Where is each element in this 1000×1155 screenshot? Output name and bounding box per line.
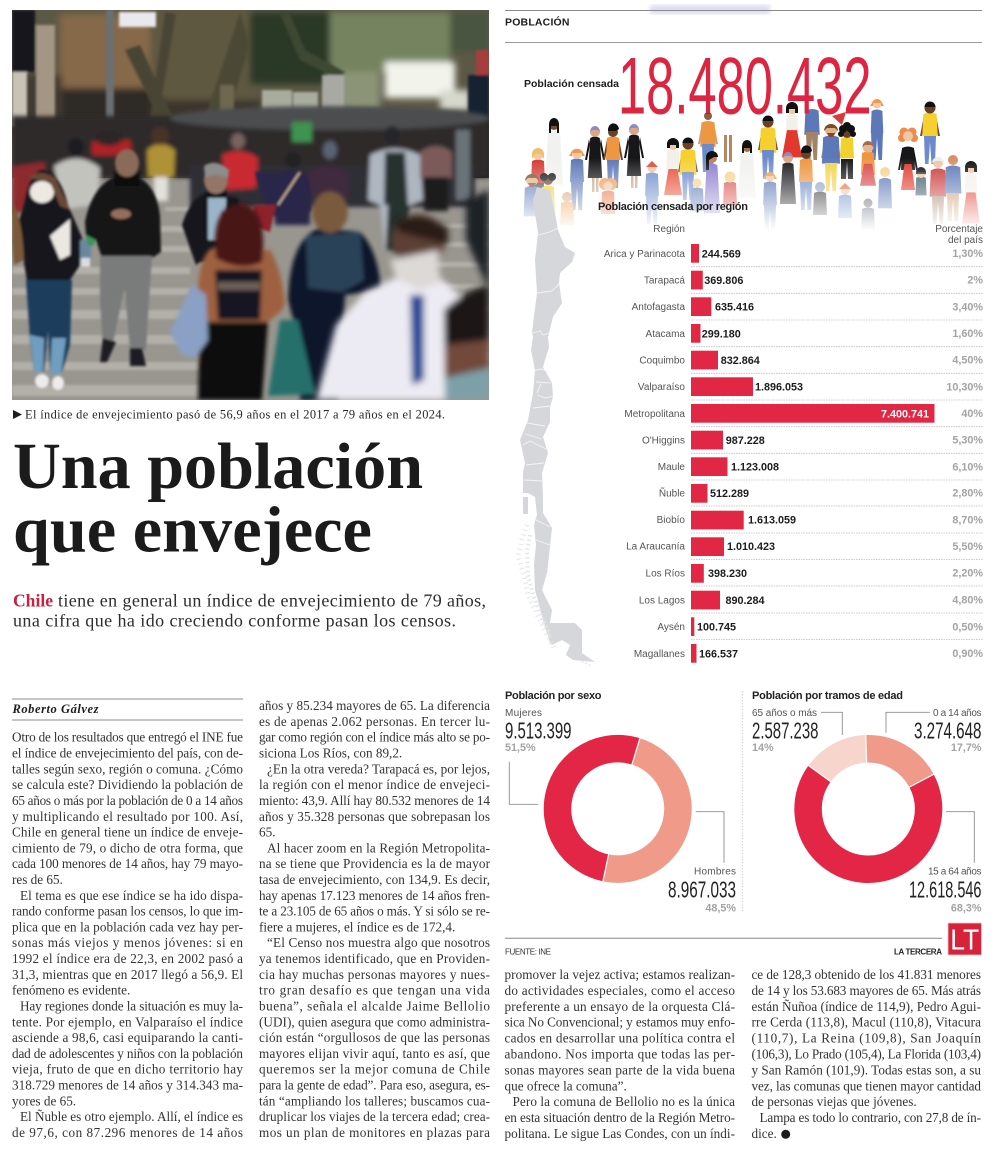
- article column 3: preferente a un ensayo de la orquesta Clá-: [504, 999, 735, 1014]
- article column 3: en esta situación dentro de la Región Metro-: [504, 1110, 735, 1125]
- article column 3: politana. Le sigue Las Condes, con un índi-: [504, 1126, 735, 1141]
- article column 2: druplicar los viajes de la tercera edad; crea-: [259, 1109, 490, 1124]
- row: Arica y Parinacota: [604, 244, 983, 263]
- row: Metropolitana: 7.400.741: [881, 408, 929, 420]
- donut: población por sexo: 51,5%: [505, 742, 536, 754]
- donut: población por tramos de edad: Población por tramos de edad: [752, 690, 903, 702]
- background crowd: [12, 106, 490, 250]
- row: Tarapacá: 2%: [967, 275, 983, 287]
- article column 2: años y 35.328 personas que sobrepasan los: [259, 809, 490, 824]
- donut: población por sexo: Población por sexo: [505, 690, 602, 702]
- article column 1: cimiento de 79, o dicho de otra forma, que: [12, 840, 243, 855]
- row: Aysén: [657, 617, 983, 636]
- donut: población por tramos de edad: 17,7%: [951, 742, 982, 754]
- article column 4: dice.: [752, 1126, 777, 1141]
- donut: población por sexo: Hombres: [694, 867, 736, 878]
- byline: Roberto Gálvez: [12, 702, 99, 716]
- row: Valparaíso: 10,30%: [946, 381, 983, 393]
- article column 3: Pero la comuna de Bellolio no es la única: [512, 1094, 735, 1109]
- row: Valparaíso: Valparaíso: [638, 382, 685, 393]
- chart footer: source: FUENTE: INE: [505, 947, 551, 956]
- article column 1: se calcula este? Dividiendo la población de: [12, 777, 243, 792]
- row: Antofagasta: Antofagasta: [632, 302, 685, 313]
- big total: [524, 42, 872, 132]
- article column 2: hay apenas 17.123 menores de 14 años fren-: [259, 888, 490, 903]
- article column 1: tente. Por ejemplo, en Valparaíso el índice: [12, 1014, 243, 1029]
- row: Magallanes: 0,90%: [952, 648, 983, 660]
- article column 1: 65 años o más por la población de 0 a 14 años: [12, 793, 243, 808]
- article column 2: mayores elijan vivir aquí, tanto es así, que: [259, 1046, 490, 1061]
- row: O'Higgins: [642, 431, 983, 449]
- article column 2: gar como región con el índice más alto se po-: [259, 730, 490, 745]
- article column 4: [752, 967, 981, 1141]
- article column 2: (UDI), quien asegura que como administra-: [259, 1014, 490, 1029]
- chart: población censada por región: Porcentaje: [935, 224, 983, 235]
- article column 4: (106,3), Lo Prado (105,4), La Florida (103,4): [752, 1046, 981, 1062]
- article column 1: Hay regiones donde la situación es muy la-: [20, 998, 243, 1014]
- row: O'Higgins: O'Higgins: [642, 436, 685, 446]
- article column 4: (110,7), La Reina (109,8), San Joaquín: [752, 1031, 981, 1046]
- article column 1: fenómeno es evidente.: [12, 983, 130, 998]
- article column 1: yores de 65.: [12, 1093, 76, 1108]
- title: Una población: [13, 430, 423, 503]
- row: Ñuble: Ñuble: [659, 486, 685, 500]
- article column 1: 31,3, mientras que en 2017 llegó a 56,9. El: [12, 967, 243, 982]
- article column 4: Lampa es todo lo contrario, con 27,8 de ín-: [760, 1110, 981, 1125]
- caption marker: [13, 410, 22, 419]
- article column 2: tán “ampliando los talleres; buscamos cua-: [259, 1093, 490, 1108]
- row: Biobío: 8,70%: [952, 514, 983, 526]
- row: Coquimbo: Coquimbo: [639, 356, 685, 366]
- article column 2: buena”, señala el alcalde Jaime Bellolio: [259, 998, 490, 1014]
- article column 1: plica que en la población cada vez hay per-: [12, 919, 243, 934]
- article column 1: talles según sexo, región o comuna. ¿Cómo: [12, 761, 243, 776]
- row: Ñuble: [659, 484, 983, 503]
- row: Aysén: 100.745: [697, 622, 736, 634]
- row: Biobío: [657, 511, 983, 529]
- article column 1: [12, 730, 243, 1140]
- article column 1: Chile en general tiene un índice de enveje-: [12, 825, 243, 840]
- donut: población por sexo: [505, 690, 736, 915]
- row: La Araucanía: [626, 537, 983, 556]
- article column 4: están Ñuñoa (índice de 114,9), Pedro Agui-: [752, 999, 981, 1014]
- article column 1: y multiplicando el resultado por 100. Así,: [12, 809, 243, 824]
- article column 2: años y 85.234 mayores de 65. La diferencia: [259, 698, 490, 713]
- row: Atacama: 299.180: [702, 328, 741, 340]
- row: Magallanes: [634, 644, 983, 663]
- article column 3: [504, 967, 735, 1141]
- donut: población por sexo: 8.967.033: [668, 877, 736, 903]
- chart footer: source: [505, 938, 942, 956]
- row: Aysén: 0,50%: [952, 621, 983, 633]
- donut: población por tramos de edad: 0 a 14 años: [933, 708, 982, 719]
- article column 2: ción están “orgullosos de que las personas: [259, 1030, 490, 1045]
- row: Tarapacá: [644, 271, 983, 289]
- title: [13, 430, 423, 566]
- row: Los Lagos: 890.284: [726, 595, 765, 607]
- article column 2: queremos ser la mejor comuna de Chile: [259, 1062, 490, 1077]
- big total: Población censada: [524, 78, 619, 90]
- subtitle: una cifra que ha ido creciendo conforme pasan los censos.: [13, 610, 456, 630]
- article column 4: ce de 128,3 obtenido de los 41.831 menores: [752, 967, 981, 982]
- row: Arica y Parinacota: 244.569: [702, 248, 741, 260]
- row: Los Lagos: Los Lagos: [639, 596, 685, 606]
- row: Tarapacá: Tarapacá: [644, 276, 685, 286]
- donut: población por tramos de edad: 65 años o más: [752, 708, 817, 719]
- photo caption: El índice de envejecimiento pasó de 56,9 años en el 2017 a 79 años en el 2024.: [25, 408, 445, 422]
- row: Arica y Parinacota: Arica y Parinacota: [604, 249, 685, 260]
- chart: población censada por región: Región: [653, 224, 685, 235]
- article column 3: que ofrece la comuna”.: [504, 1078, 627, 1093]
- article column 1: El tema es que ese índice se ha ido dispa-: [20, 888, 243, 903]
- row: O'Higgins: 987.228: [726, 435, 765, 447]
- article column 3: sonas mayores sean parte de la vida buena: [504, 1062, 735, 1077]
- article column 3: do actividades especiales, como el acceso: [504, 983, 735, 998]
- article column 2: [259, 698, 491, 1140]
- row: Magallanes: Magallanes: [634, 649, 685, 660]
- article column 1: vieja, fruto de que en dicho territorio hay: [12, 1062, 243, 1077]
- subtitle: Chile: [13, 590, 53, 610]
- row: Los Ríos: 2,20%: [952, 568, 983, 580]
- donut: población por tramos de edad: [752, 690, 982, 915]
- donut: población por sexo: 9.513.399: [505, 717, 572, 743]
- donut: población por sexo: Mujeres: [505, 708, 542, 719]
- article column 2: miento: 43,9. Allí hay 80.532 menores de 14: [259, 793, 490, 808]
- article column 1: dad de adolescentes y niños con la población: [12, 1046, 243, 1061]
- row: Antofagasta: 635.416: [715, 302, 754, 314]
- article column 2: ya tenemos identificado, que en Providen-: [259, 951, 490, 966]
- row: Coquimbo: 4,50%: [952, 355, 983, 367]
- subtitle: [13, 590, 486, 630]
- article column 2: mos un plan de monitores en plazas para: [259, 1125, 490, 1140]
- row: Tarapacá: 369.806: [704, 275, 743, 287]
- row: Los Ríos: 398.230: [708, 568, 747, 580]
- row: Aysén: Aysén: [657, 622, 685, 633]
- section header: POBLACIÓN: [505, 16, 570, 28]
- article column 2: Al hacer zoom en la Región Metropolita-: [267, 840, 490, 855]
- article column 1: El Ñuble es otro ejemplo. Allí, el índice es: [20, 1109, 243, 1124]
- article column 1: de 97,6, con 87.296 menores de 14 años: [12, 1125, 243, 1140]
- row: Metropolitana: [624, 404, 983, 423]
- article column 2: tasa de envejecimiento, con 134,9. Es decir,: [259, 872, 490, 887]
- row: O'Higgins: 5,30%: [952, 435, 983, 447]
- article column 2: es de apenas 2.062 personas. En tercer lu-: [259, 714, 490, 729]
- article column 3: abandono. Nos importa que todas las per-: [504, 1046, 735, 1062]
- row: La Araucanía: La Araucanía: [626, 542, 685, 553]
- row: Los Lagos: [639, 591, 983, 609]
- donut: población por sexo: 48,5%: [705, 903, 736, 915]
- foreground figures: [12, 149, 312, 390]
- donut: población por tramos de edad: 15 a 64 años: [928, 867, 982, 878]
- article column 2: 65.: [259, 825, 275, 840]
- photo: pedestrians on Paseo Ahumada: [12, 10, 490, 400]
- row: Biobío: 1.613.059: [748, 514, 796, 526]
- article column 2: siciona Los Ríos, con 89,2.: [259, 746, 402, 760]
- donut: población por tramos de edad: 2.587.238: [752, 717, 818, 743]
- article column 1: asciende a 98,6, casi equiparando la canti-: [12, 1030, 243, 1045]
- article column 3: cados en desarrollar una política contra el: [504, 1031, 735, 1046]
- article column 1: 1992 el índice era de 22,3, en 2002 pasó a: [12, 951, 243, 966]
- fade over the crowd: [505, 158, 1000, 243]
- article column 2: para la gente de edad”. Para eso, asegura, es-: [259, 1078, 490, 1092]
- row: Maule: Maule: [658, 462, 685, 473]
- article column 4: de 14 y los 53.683 mayores de 65. Más atrás: [752, 983, 981, 998]
- row: Ñuble: 2,80%: [952, 488, 983, 500]
- row: Los Ríos: [646, 564, 983, 583]
- people illustration: [524, 99, 980, 233]
- article column 2: “El Censo nos muestra algo que nosotros: [267, 935, 490, 950]
- article column 2: te a 23.105 de 65 años o más. Y si sólo se re-: [259, 904, 490, 919]
- row: Atacama: 1,60%: [952, 328, 983, 340]
- article column 4: de personas viejas que jóvenes.: [752, 1094, 917, 1109]
- dotted separator between donuts: [741, 691, 743, 912]
- article column 3: promover la vejez activa; estamos realizan-: [504, 967, 735, 982]
- donut: población por tramos de edad: 14%: [752, 742, 774, 754]
- article column 1: el índice de envejecimiento del país, con de-: [12, 746, 243, 760]
- row: Coquimbo: 832.864: [721, 355, 760, 367]
- row: Arica y Parinacota: 1,30%: [952, 248, 983, 260]
- row: Ñuble: 512.289: [710, 488, 749, 500]
- title: que envejece: [13, 494, 372, 566]
- article column 2: la región con el menor índice de envejeci-: [259, 777, 490, 792]
- article column 4: vez, las comunas que tienen mayor cantidad: [752, 1078, 981, 1093]
- article column 2: tro gran desafío es que tengan una vida: [259, 983, 490, 998]
- logo: La Tercera: LT: [950, 924, 979, 956]
- row: Metropolitana: Metropolitana: [624, 409, 685, 420]
- article column 2: fiere a mujeres, el índice es de 172,4.: [259, 919, 455, 934]
- chart footer: source: LA TERCERA: [894, 947, 942, 956]
- row: Antofagasta: 3,40%: [952, 301, 983, 313]
- row: La Araucanía: 1.010.423: [727, 541, 775, 553]
- row: Coquimbo: [639, 351, 983, 369]
- end-of-article bullet: [781, 1130, 790, 1139]
- row: Biobío: Biobío: [657, 515, 685, 526]
- row: Valparaíso: 1.896.053: [755, 382, 803, 394]
- pavement: [12, 178, 489, 400]
- row: Valparaíso: [638, 377, 983, 396]
- article column 1: res de 65.: [12, 872, 63, 887]
- article column 3: sica No Convencional; y estamos muy enfo-: [504, 1015, 735, 1030]
- row: Maule: 1.123.008: [731, 462, 779, 474]
- row dividers: [691, 267, 983, 640]
- subtitle: tiene en general un índice de envejecimiento de 79 años,: [58, 590, 486, 610]
- article column 4: y San Ramón (101,9). Todas estas son, a su: [752, 1062, 981, 1077]
- article column 1: 318.729 menores de 14 años y 314.343 ma-: [12, 1078, 243, 1092]
- chart: población censada por región: del país: [948, 235, 983, 246]
- row: Los Ríos: Los Ríos: [646, 568, 685, 579]
- article column 2: ¿En la otra vereda? Tarapacá es, por lejos,: [267, 761, 490, 776]
- row: La Araucanía: 5,50%: [952, 541, 983, 553]
- row: Atacama: Atacama: [646, 329, 685, 340]
- article column 2: na se tiene que Providencia es la de mayor: [259, 856, 491, 871]
- section header: [505, 5, 982, 42]
- article column 1: sonas más viejos y menos jóvenes: si en: [12, 935, 243, 950]
- article column 1: Otro de los resultados que entregó el INE fue: [12, 730, 243, 745]
- chart: población censada por región: [598, 201, 983, 663]
- article column 1: rando conforme pasan los censos, lo que im-: [12, 904, 243, 919]
- row: Maule: 6,10%: [952, 461, 983, 473]
- article column 2: cia hay muchas personas mayores y nues-: [259, 967, 490, 982]
- donut: población por tramos de edad: 68,3%: [951, 903, 982, 915]
- map of Chile: [518, 187, 595, 665]
- article column 1: cada 100 menores de 14 años, hay 79 mayo-: [12, 856, 243, 871]
- chart: población censada por región: Población censada por región: [598, 201, 748, 213]
- row: Metropolitana: 40%: [961, 408, 983, 420]
- row: Antofagasta: [632, 297, 983, 316]
- row: Los Lagos: 4,80%: [952, 595, 983, 607]
- row: Maule: [658, 457, 983, 476]
- row: Atacama: [646, 324, 983, 343]
- article column 4: rre Cerda (113,8), Macul (110,8), Vitacura: [752, 1015, 981, 1030]
- row: Magallanes: 166.537: [699, 648, 738, 660]
